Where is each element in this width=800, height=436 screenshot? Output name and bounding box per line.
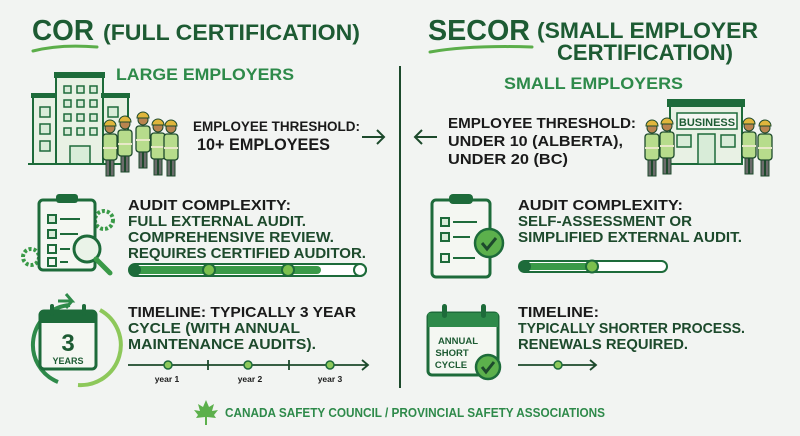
title: SECOR: CERTIFICATION) bbox=[557, 40, 733, 65]
text: COR audit complexity: FULL EXTERNAL AUDIT. bbox=[128, 213, 306, 230]
icon: office building with workers bbox=[28, 72, 178, 176]
text: COR audit complexity: REQUIRES CERTIFIED AUDITOR. bbox=[128, 245, 366, 262]
title: COR bbox=[32, 15, 360, 51]
icon: annual short cycle calendar: CYCLE bbox=[435, 360, 467, 371]
arrow: right bbox=[362, 130, 384, 144]
text: COR timeline bbox=[128, 304, 356, 353]
text: SECOR timeline: RENEWALS REQUIRED. bbox=[518, 336, 688, 353]
text: SECOR audit complexity: SELF-ASSESSMENT OR bbox=[518, 213, 692, 230]
icon: 3 years calendar with cycle arrows bbox=[33, 294, 121, 385]
divider bbox=[399, 66, 401, 388]
timeline: short arrow bbox=[518, 360, 596, 370]
icon: annual short cycle calendar bbox=[428, 304, 500, 379]
footer: source bbox=[194, 400, 605, 425]
icon: business storefront with workers bbox=[645, 99, 772, 176]
title: COR: (FULL CERTIFICATION) bbox=[103, 20, 360, 45]
text: COR timeline: TIMELINE: TYPICALLY 3 YEAR bbox=[128, 304, 356, 321]
icon: annual short cycle calendar: SHORT bbox=[435, 348, 469, 359]
arrow: left bbox=[415, 130, 437, 144]
text: COR timeline: CYCLE (WITH ANNUAL bbox=[128, 320, 300, 337]
icon: 3 years calendar with cycle arrows: 3 bbox=[61, 330, 75, 357]
timeline: 3 year axis: year 3 bbox=[318, 374, 343, 384]
heading: small employers: SMALL EMPLOYERS bbox=[504, 74, 683, 93]
text: COR timeline: MAINTENANCE AUDITS). bbox=[128, 336, 316, 353]
icon: 3 years calendar with cycle arrows: YEARS bbox=[52, 356, 84, 366]
bar: SECOR audit complexity scale bbox=[519, 260, 667, 272]
text: SECOR employee threshold bbox=[448, 115, 636, 168]
text: COR audit complexity: AUDIT COMPLEXITY: bbox=[128, 197, 291, 214]
title: COR: COR bbox=[32, 15, 94, 47]
text: SECOR audit complexity: SIMPLIFIED EXTERNAL AUDIT. bbox=[518, 229, 742, 246]
text: SECOR employee threshold: UNDER 20 (BC) bbox=[448, 151, 568, 168]
text: SECOR audit complexity: AUDIT COMPLEXITY: bbox=[518, 197, 683, 214]
title: SECOR: (SMALL EMPLOYER bbox=[537, 18, 758, 43]
text: COR employee threshold: EMPLOYEE THRESHOLD: bbox=[193, 119, 360, 134]
icon: annual short cycle calendar: ANNUAL bbox=[438, 336, 478, 347]
text: COR audit complexity bbox=[128, 197, 366, 262]
timeline: 3 year axis: year 1 bbox=[155, 374, 180, 384]
text: SECOR employee threshold: EMPLOYEE THRESHOLD: bbox=[448, 115, 636, 132]
footer: source: CANADA SAFETY COUNCIL / PROVINCIAL SAFETY ASSOCIATIONS bbox=[225, 406, 605, 420]
text: SECOR employee threshold: UNDER 10 (ALBERTA), bbox=[448, 133, 623, 150]
timeline: 3 year axis bbox=[128, 360, 368, 384]
title: SECOR bbox=[428, 15, 758, 65]
text: COR employee threshold bbox=[193, 119, 360, 154]
text: SECOR timeline bbox=[518, 304, 745, 353]
text: SECOR audit complexity bbox=[518, 197, 742, 246]
text: COR employee threshold: 10+ EMPLOYEES bbox=[197, 135, 330, 154]
timeline: 3 year axis: year 2 bbox=[238, 374, 263, 384]
text: SECOR timeline: TYPICALLY SHORTER PROCESS. bbox=[518, 320, 745, 337]
icon: business storefront with workers: BUSINESS bbox=[679, 117, 735, 129]
text: COR audit complexity: COMPREHENSIVE REVIEW. bbox=[128, 229, 334, 246]
text: SECOR timeline: TIMELINE: bbox=[518, 304, 599, 321]
title: SECOR: SECOR bbox=[428, 15, 530, 47]
heading: large employers: LARGE EMPLOYERS bbox=[116, 65, 294, 84]
icon: clipboard with check bbox=[432, 194, 503, 277]
icon: clipboard with magnifier and gears bbox=[23, 194, 113, 273]
bar: COR audit complexity scale bbox=[129, 264, 366, 276]
